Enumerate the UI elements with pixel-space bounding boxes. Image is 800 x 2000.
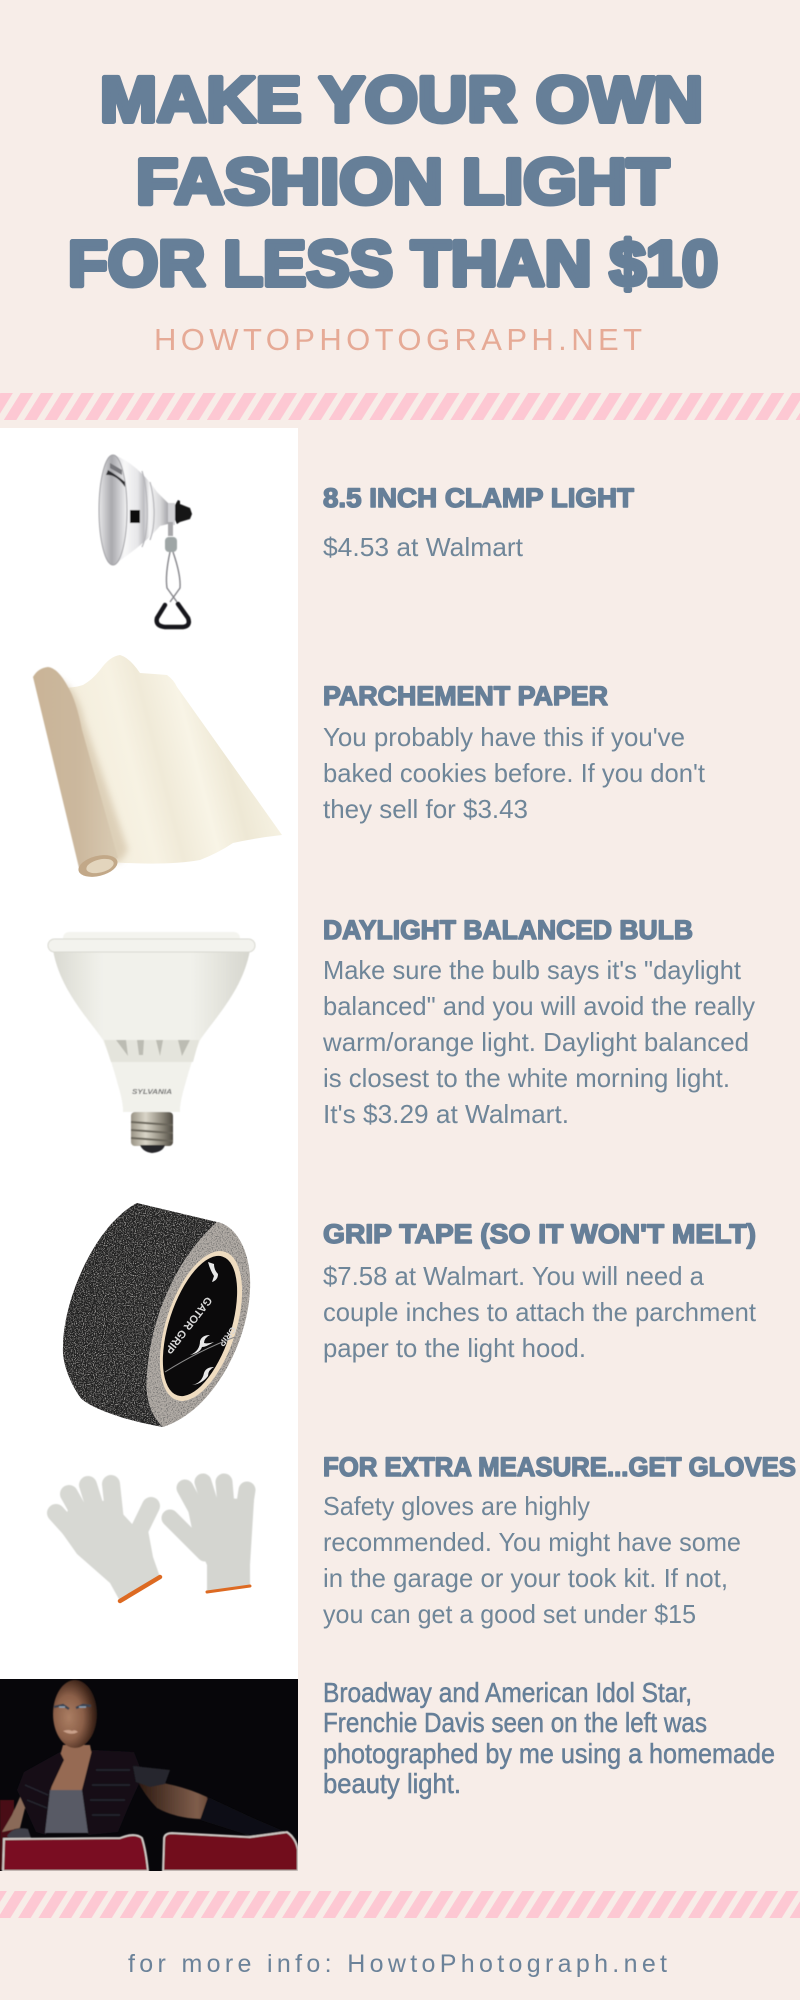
text: gloves note: recommended. You might have some <box>323 1527 741 1557</box>
text: grip tape note <box>323 1261 757 1363</box>
icon: roll of grip tape: GRIP <box>217 1325 238 1348</box>
subtitle: website: HOWTOPHOTOGRAPH.NET <box>154 322 642 357</box>
caption text <box>323 1677 775 1799</box>
heading: parchment paper: PARCHEMENT PAPER <box>323 681 608 711</box>
footer: website link: for more info: HowtoPhotograph.net <box>128 1950 667 1978</box>
text: bulb note: balanced" and you will avoid the really <box>323 991 755 1021</box>
caption text: beauty light. <box>323 1768 461 1799</box>
heading: clamp light: 8.5 INCH CLAMP LIGHT <box>323 483 635 513</box>
icon: light bulb: SYLVANIA <box>132 1087 172 1096</box>
title <box>68 64 718 300</box>
panel: parchment paper <box>33 655 706 881</box>
text: gloves note: Safety gloves are highly <box>323 1491 590 1521</box>
text: bulb note: Make sure the bulb says it's "daylight <box>323 955 742 985</box>
icon: parchment roll <box>33 655 282 881</box>
photo: woman seated in theatre chairs <box>0 1680 298 1871</box>
text: parchment paper note: baked cookies before. If you don't <box>323 758 706 788</box>
heading: daylight balanced bulb: DAYLIGHT BALANCED BULB <box>323 915 693 945</box>
text: grip tape note: paper to the light hood. <box>323 1333 586 1363</box>
text: bulb note: is closest to the white morning light. <box>323 1063 730 1093</box>
icon: light bulb <box>48 932 255 1153</box>
text: bulb note: It's $3.29 at Walmart. <box>323 1099 569 1129</box>
text: parchment paper note: they sell for $3.43 <box>323 794 528 824</box>
icon: safety gloves <box>56 1482 254 1601</box>
text: bulb note <box>322 955 755 1129</box>
text: parchment paper note <box>323 722 706 824</box>
text: gloves note: you can get a good set under $15 <box>323 1599 696 1629</box>
panel: portrait photo <box>0 1679 298 1871</box>
text: gloves note: in the garage or your took kit. If not, <box>323 1563 728 1593</box>
panel: daylight balanced bulb <box>48 915 755 1153</box>
text: clamp light price: $4.53 at Walmart <box>323 532 524 562</box>
panel: grip tape <box>63 1203 757 1427</box>
title: FOR LESS THAN $10 <box>68 228 718 300</box>
icon: roll of grip tape: GATOR GRIP <box>162 1294 214 1356</box>
title: FASHION LIGHT <box>136 146 669 218</box>
text: grip tape note: $7.58 at Walmart. You will need a <box>323 1261 705 1291</box>
text: grip tape note: couple inches to attach the parchment <box>323 1297 757 1327</box>
heading: grip tape: GRIP TAPE (SO IT WON'T MELT) <box>323 1219 756 1249</box>
panel: clamp light <box>99 455 635 627</box>
text: gloves note <box>323 1491 741 1629</box>
top striped band <box>0 393 800 420</box>
caption text: Frenchie Davis seen on the left was <box>323 1707 707 1738</box>
title: MAKE YOUR OWN <box>100 64 703 136</box>
panel: gloves <box>56 1452 796 1629</box>
icon: clamp light <box>99 455 192 627</box>
icon: roll of grip tape <box>63 1203 258 1427</box>
bottom striped band <box>0 1891 800 1918</box>
caption text: Broadway and American Idol Star, <box>323 1677 692 1708</box>
white image column <box>0 428 298 1680</box>
text: bulb note: warm/orange light. Daylight balanced <box>322 1027 749 1057</box>
text: parchment paper note: You probably have this if you've <box>323 722 685 752</box>
